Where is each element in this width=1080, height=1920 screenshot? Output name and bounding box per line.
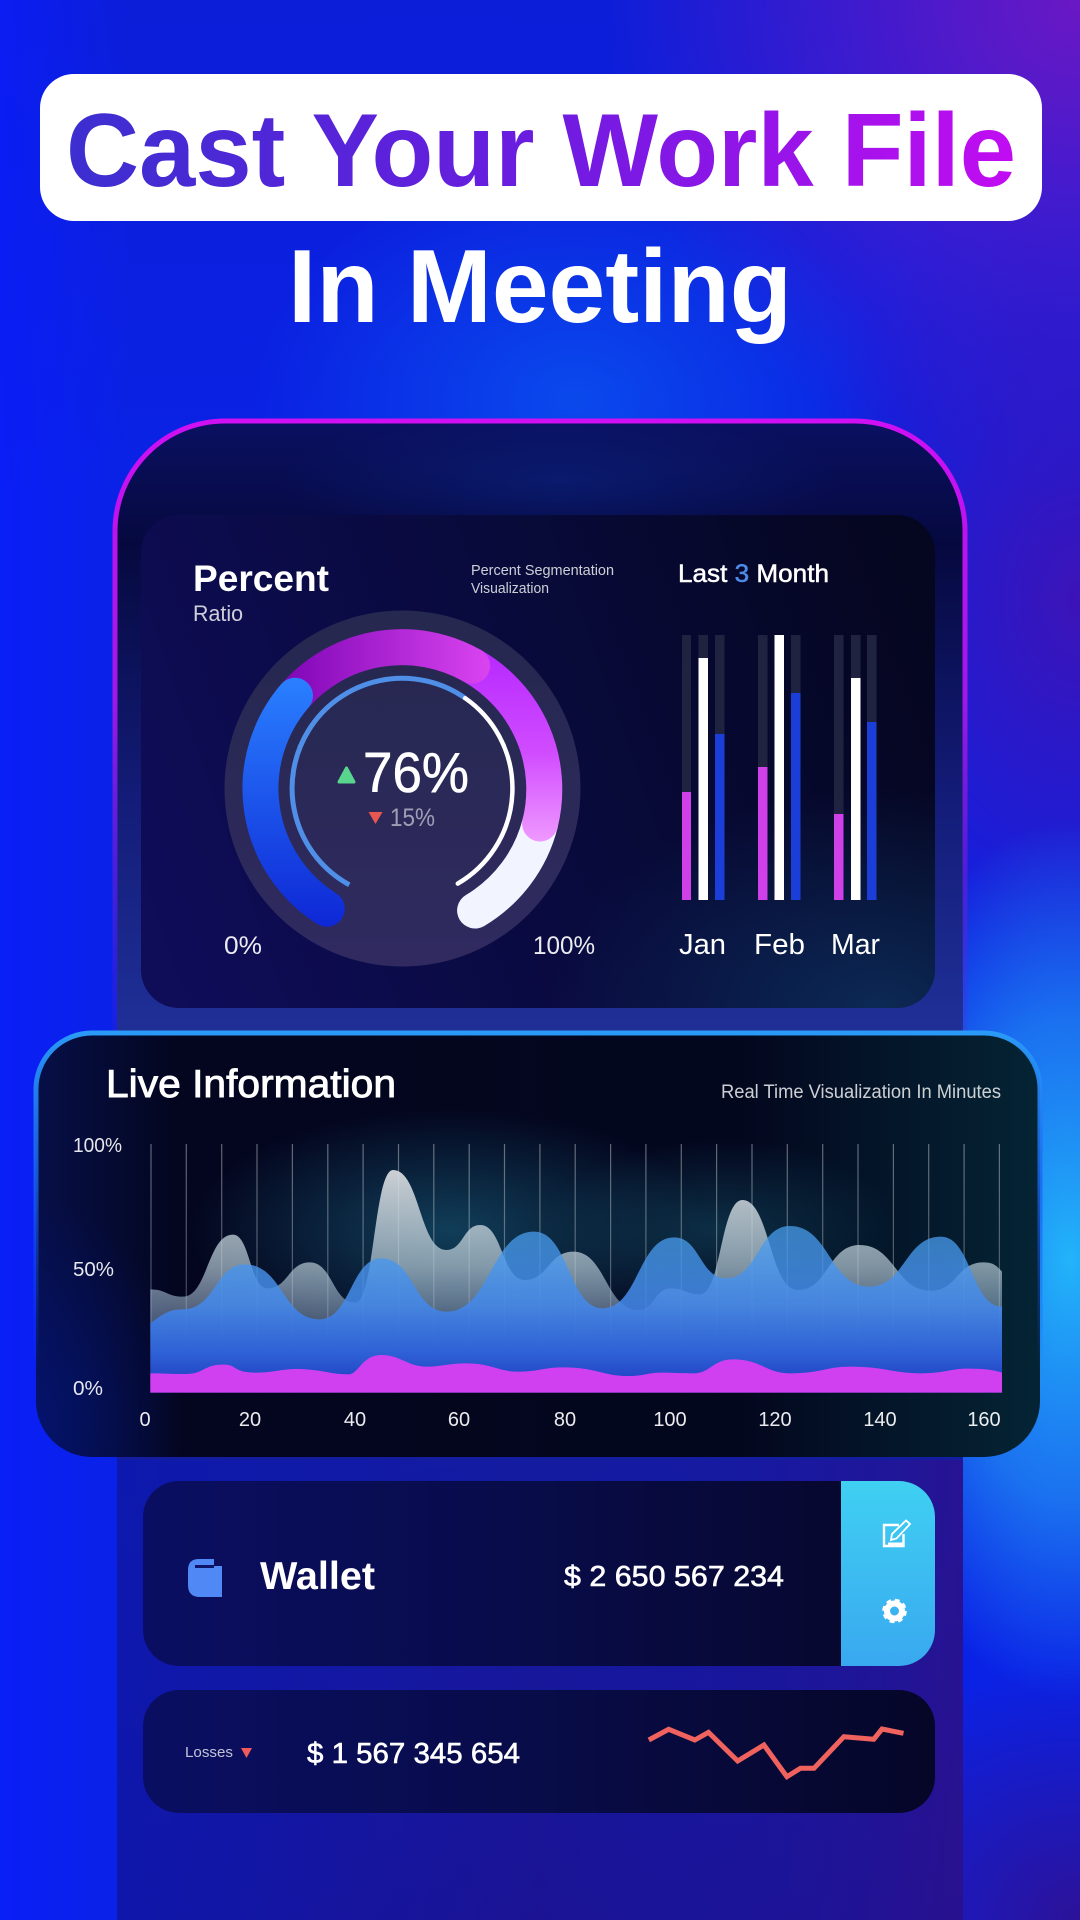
heading: live information: Live Information bbox=[106, 1063, 396, 1106]
label: losses: Losses bbox=[185, 1744, 233, 1761]
panel: losses bbox=[143, 1690, 935, 1813]
value: 76%: 76% bbox=[363, 741, 469, 805]
x axis labels: 0 bbox=[139, 1409, 151, 1431]
month labels: Feb bbox=[754, 929, 805, 961]
x axis labels: 100 bbox=[653, 1409, 687, 1431]
subtitle: In Meeting bbox=[288, 229, 792, 345]
area chart bbox=[150, 1144, 1002, 1393]
month labels: Mar bbox=[831, 929, 880, 961]
month labels: Jan bbox=[679, 929, 726, 961]
panel: live information bbox=[36, 1033, 1040, 1457]
description: Percent Segmentation bbox=[471, 562, 614, 579]
description: Visualization bbox=[471, 580, 549, 597]
x axis labels bbox=[139, 1409, 1001, 1431]
description: Real Time Visualization In Minutes bbox=[721, 1082, 1001, 1103]
icon: edit bbox=[884, 1520, 910, 1546]
side action strip bbox=[841, 1481, 935, 1666]
label: 100%: 100% bbox=[533, 932, 595, 960]
value: losses amount: $ 1 567 345 654 bbox=[307, 1738, 520, 1770]
value: 15%: 15% bbox=[390, 804, 435, 832]
x axis labels: 140 bbox=[863, 1409, 897, 1431]
gauge bbox=[224, 610, 580, 966]
icon: red down triangle bbox=[368, 812, 382, 824]
x axis labels: 40 bbox=[344, 1409, 366, 1431]
y axis labels: 100% bbox=[73, 1135, 122, 1157]
bar chart: last 3 months bbox=[682, 635, 876, 900]
icon: green up triangle bbox=[339, 768, 354, 782]
panel: percent ratio bbox=[141, 515, 935, 1008]
description bbox=[471, 562, 614, 597]
sparkline bbox=[649, 1729, 904, 1777]
heading: wallet: Wallet bbox=[260, 1555, 375, 1598]
panel: wallet bbox=[143, 1481, 935, 1666]
title pill bbox=[40, 74, 1042, 221]
x axis labels: 20 bbox=[239, 1409, 261, 1431]
value: wallet amount: $ 2 650 567 234 bbox=[564, 1561, 784, 1593]
x axis labels: 60 bbox=[448, 1409, 470, 1431]
label: ratio: Ratio bbox=[193, 601, 243, 626]
icon: wallet bbox=[188, 1559, 222, 1597]
phone frame bbox=[115, 421, 965, 1920]
icon: gear bbox=[884, 1600, 905, 1622]
heading: last 3 month: Last 3 Month bbox=[678, 560, 829, 588]
title line one: Cast Your Work File bbox=[66, 93, 1016, 209]
x axis labels: 120 bbox=[758, 1409, 792, 1431]
x axis labels: 160 bbox=[967, 1409, 1001, 1431]
heading: percent: Percent bbox=[193, 558, 329, 599]
x axis labels: 80 bbox=[554, 1409, 576, 1431]
y axis labels bbox=[73, 1135, 122, 1400]
y axis labels: 50% bbox=[73, 1259, 114, 1281]
icon: red down triangle bbox=[241, 1748, 252, 1758]
label: 0%: 0% bbox=[224, 932, 262, 960]
month labels bbox=[679, 929, 880, 961]
y axis labels: 0% bbox=[73, 1378, 103, 1400]
